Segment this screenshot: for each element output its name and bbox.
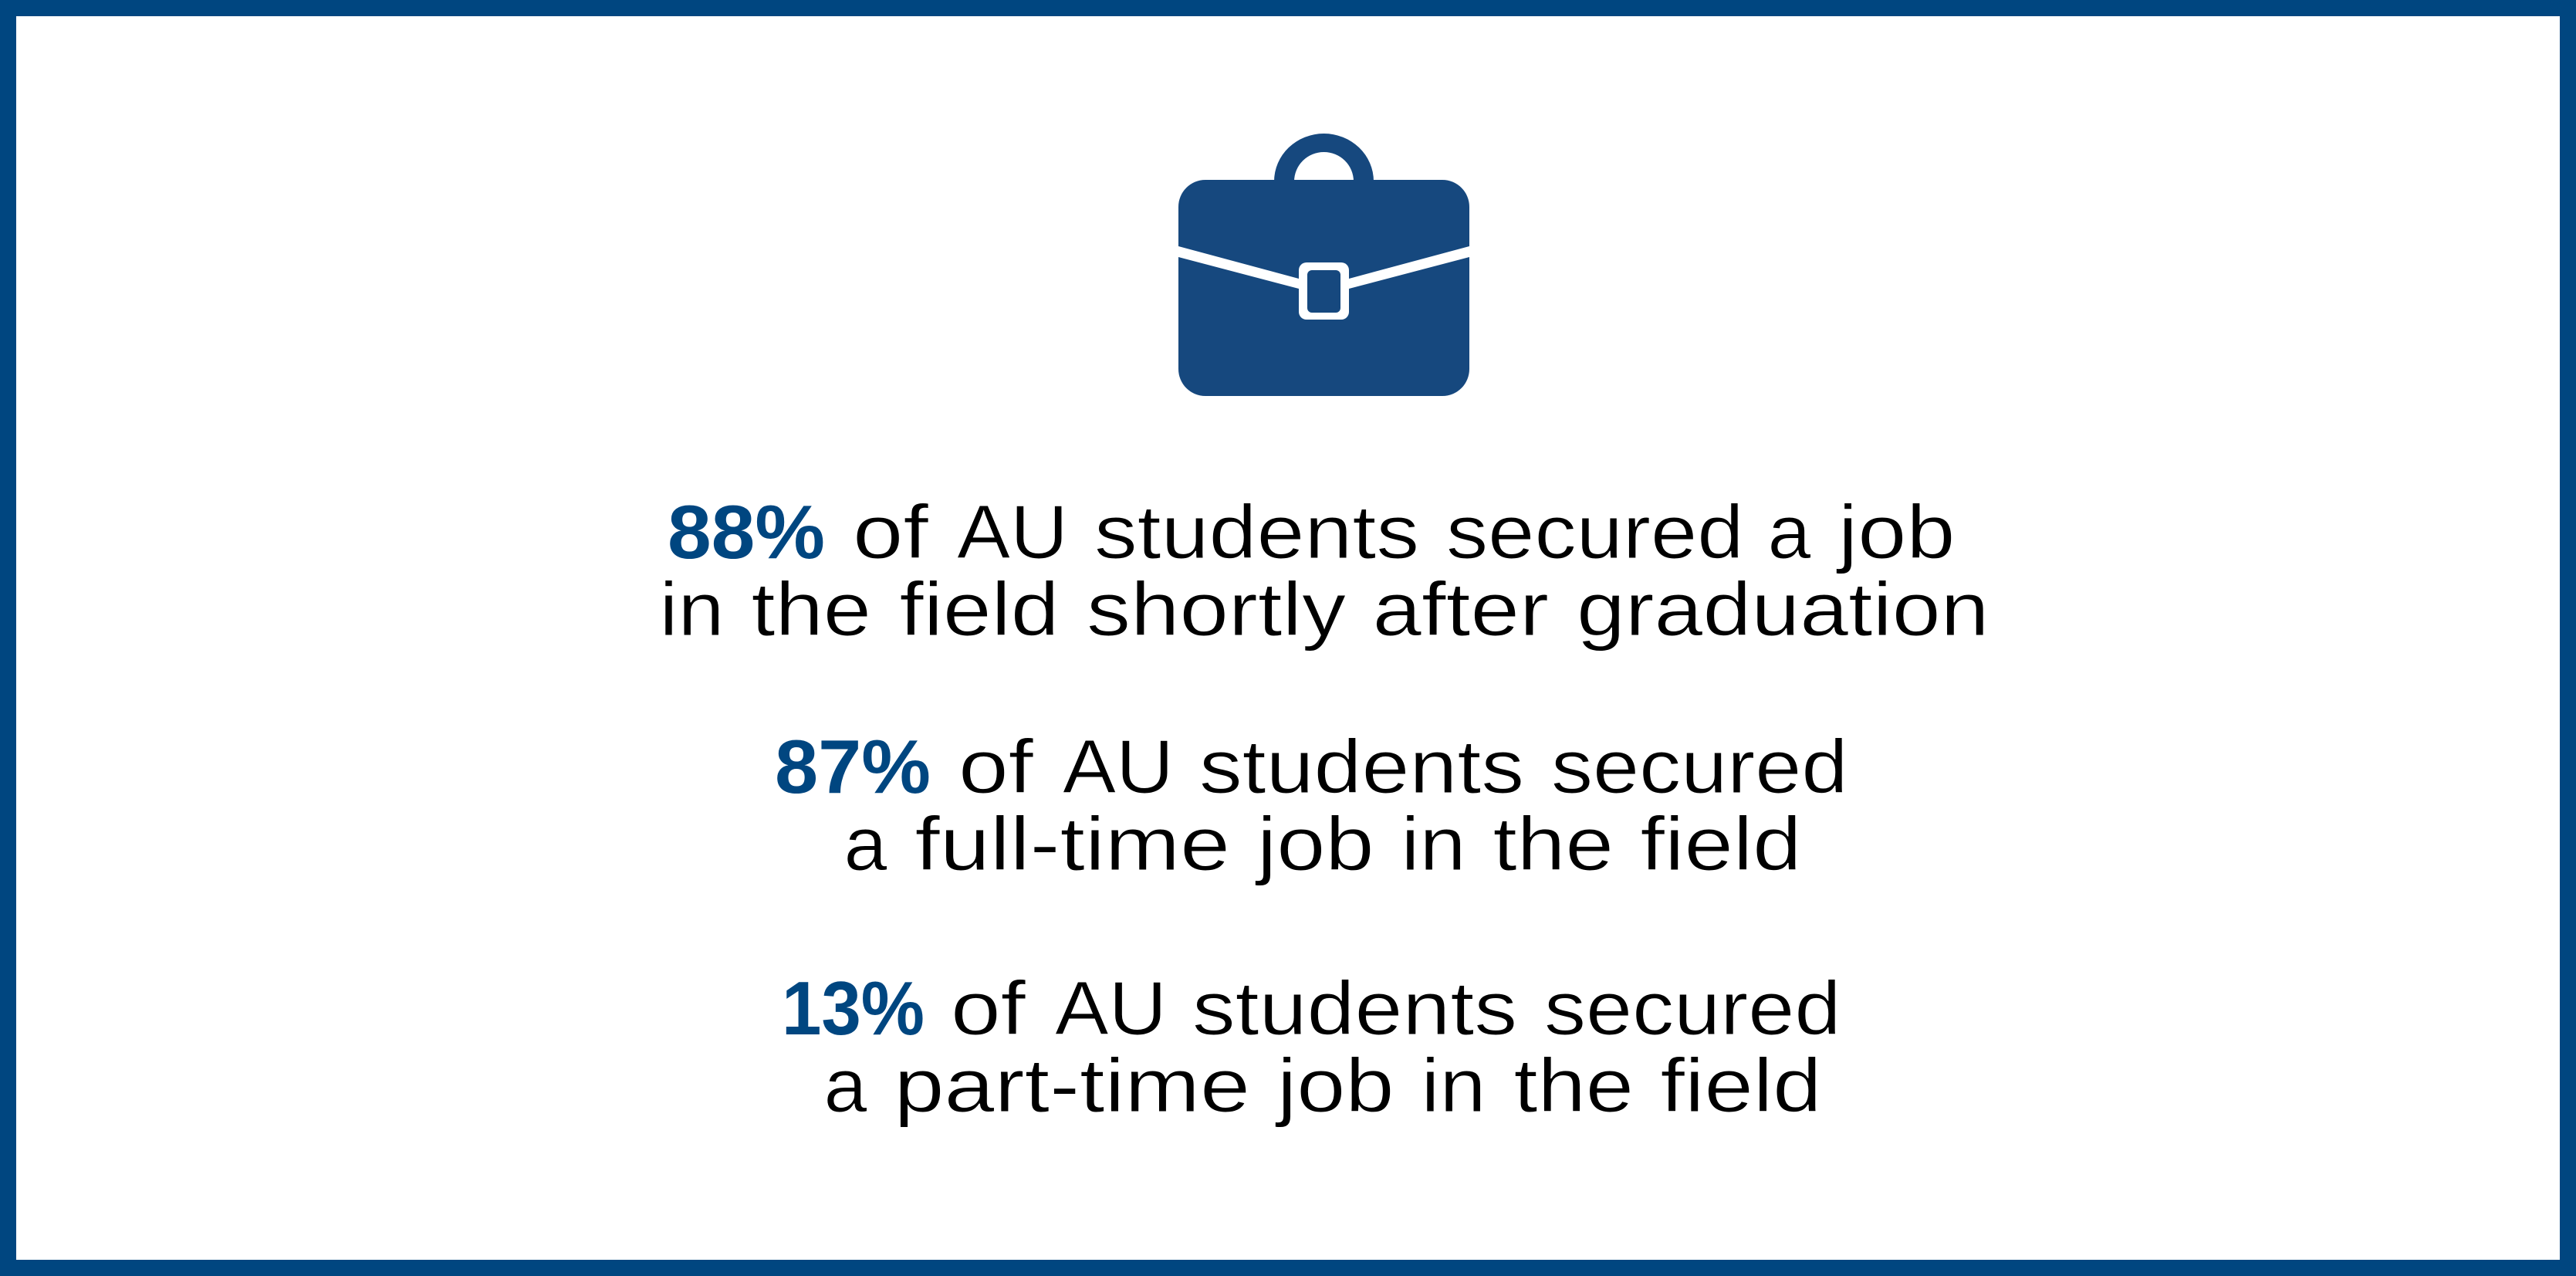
line: of AU students secured: secured: [1544, 966, 1841, 1051]
line: a full-time job in the field: field: [1641, 801, 1801, 886]
line: of AU students secured: AU: [1055, 966, 1167, 1051]
line: of AU students secured: students: [1199, 724, 1524, 809]
line: in the field shortly after graduation: in: [659, 567, 724, 652]
line: a part-time job in the field: job: [1275, 1043, 1394, 1128]
line: a full-time job in the field: job: [1255, 801, 1374, 886]
text block: 87% full-time job: [775, 724, 1847, 886]
line: in the field shortly after graduation: field: [900, 567, 1059, 652]
line: a part-time job in the field: part-time: [894, 1043, 1250, 1128]
line: a full-time job in the field: full-time: [915, 801, 1230, 886]
line: of AU students secured a job: of: [853, 489, 929, 574]
line: in the field shortly after graduation: after: [1372, 567, 1549, 652]
line: a full-time job in the field: a: [844, 801, 887, 886]
line: of AU students secured: [951, 966, 1841, 1051]
line: of AU students secured: of: [958, 724, 1034, 809]
line: a part-time job in the field: field: [1661, 1043, 1821, 1128]
line: a part-time job in the field: in: [1422, 1043, 1486, 1128]
line: in the field shortly after graduation: [659, 567, 1989, 652]
line: a full-time job in the field: the: [1493, 801, 1614, 886]
line: a part-time job in the field: [824, 1043, 1821, 1128]
icon: briefcase: [1178, 134, 1469, 396]
line: of AU students secured a job: secured: [1446, 489, 1744, 574]
line: of AU students secured a job: job: [1836, 489, 1956, 574]
line: in the field shortly after graduation: shortly: [1087, 567, 1346, 652]
line: in the field shortly after graduation: the: [752, 567, 871, 652]
line: of AU students secured: AU: [1063, 724, 1174, 809]
line: a full-time job in the field: in: [1401, 801, 1466, 886]
line: of AU students secured a job: students: [1094, 489, 1419, 574]
stat: 87%: 87%: [775, 724, 931, 809]
stat: 13%: 13%: [782, 966, 925, 1051]
line: of AU students secured: [958, 724, 1847, 809]
line: of AU students secured: students: [1192, 966, 1517, 1051]
line: of AU students secured a job: [853, 489, 1956, 574]
line: a full-time job in the field: [844, 801, 1801, 886]
line: of AU students secured: secured: [1551, 724, 1847, 809]
line: in the field shortly after graduation: graduation: [1577, 567, 1989, 652]
stat: 88%: 88%: [668, 489, 825, 574]
text block: 88% secured a job: [659, 489, 1989, 652]
text block: 13% part-time job: [782, 966, 1841, 1128]
line: of AU students secured: of: [951, 966, 1026, 1051]
line: of AU students secured a job: a: [1767, 489, 1811, 574]
line: a part-time job in the field: the: [1514, 1043, 1634, 1128]
line: a part-time job in the field: a: [824, 1043, 867, 1128]
line: of AU students secured a job: AU: [957, 489, 1068, 574]
